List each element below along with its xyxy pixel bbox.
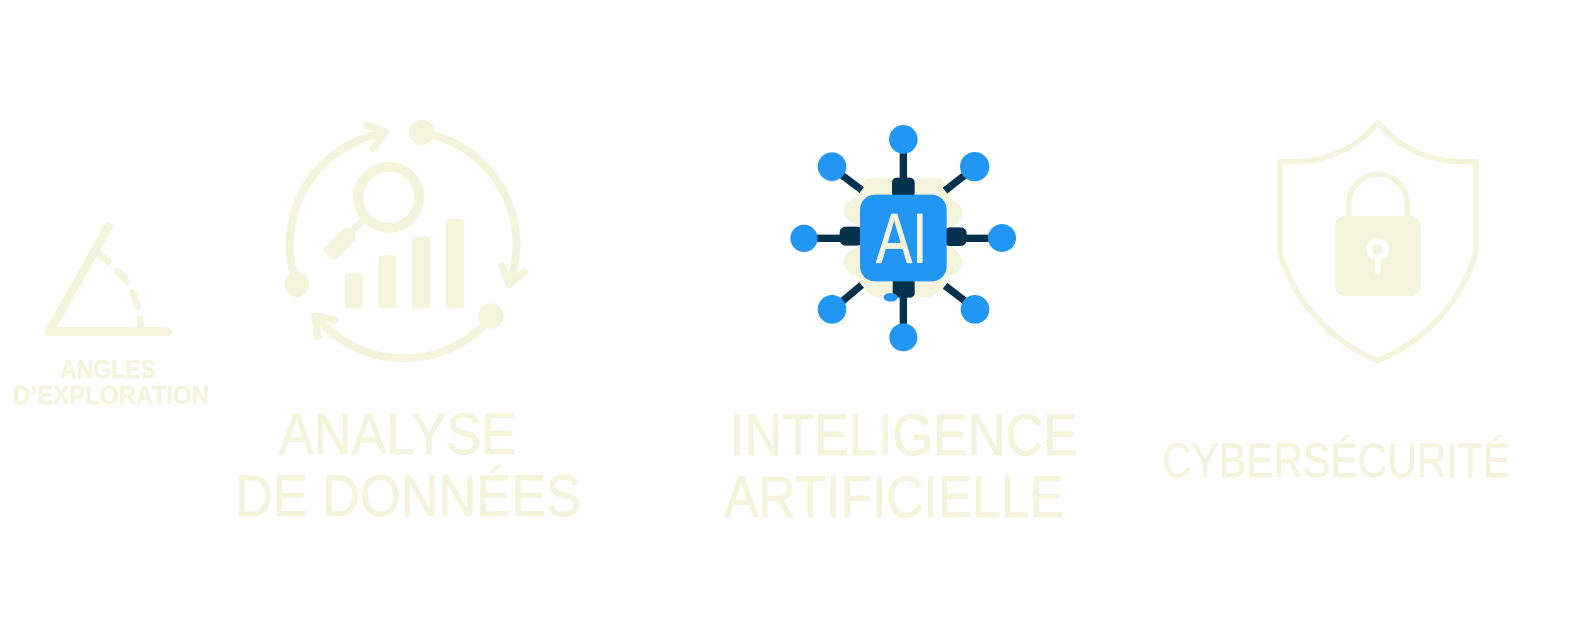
icon: security shield with padlock xyxy=(1280,123,1476,361)
icon: data analysis cycle xyxy=(284,120,524,358)
heading: analyse de données xyxy=(235,402,581,529)
heading: cybersécurité: CYBERSÉCURITÉ xyxy=(1162,435,1510,488)
heading: intelligence artificielle: INTELIGENCE xyxy=(730,403,1078,468)
heading: intelligence artificielle: ARTIFICIELLE xyxy=(724,465,1064,530)
icon: angle xyxy=(49,227,168,332)
icon: artificial intelligence chip xyxy=(790,125,1016,351)
heading: angles d'exploration xyxy=(13,354,209,410)
heading: angles d'exploration: D’EXPLORATION xyxy=(13,380,209,410)
heading: analyse de données: DE DONNÉES xyxy=(235,464,581,529)
icon: artificial intelligence chip: AI xyxy=(876,199,927,278)
heading: analyse de données: ANALYSE xyxy=(279,402,516,467)
heading: angles d'exploration: ANGLES xyxy=(60,354,156,384)
heading: intelligence artificielle xyxy=(724,403,1078,530)
